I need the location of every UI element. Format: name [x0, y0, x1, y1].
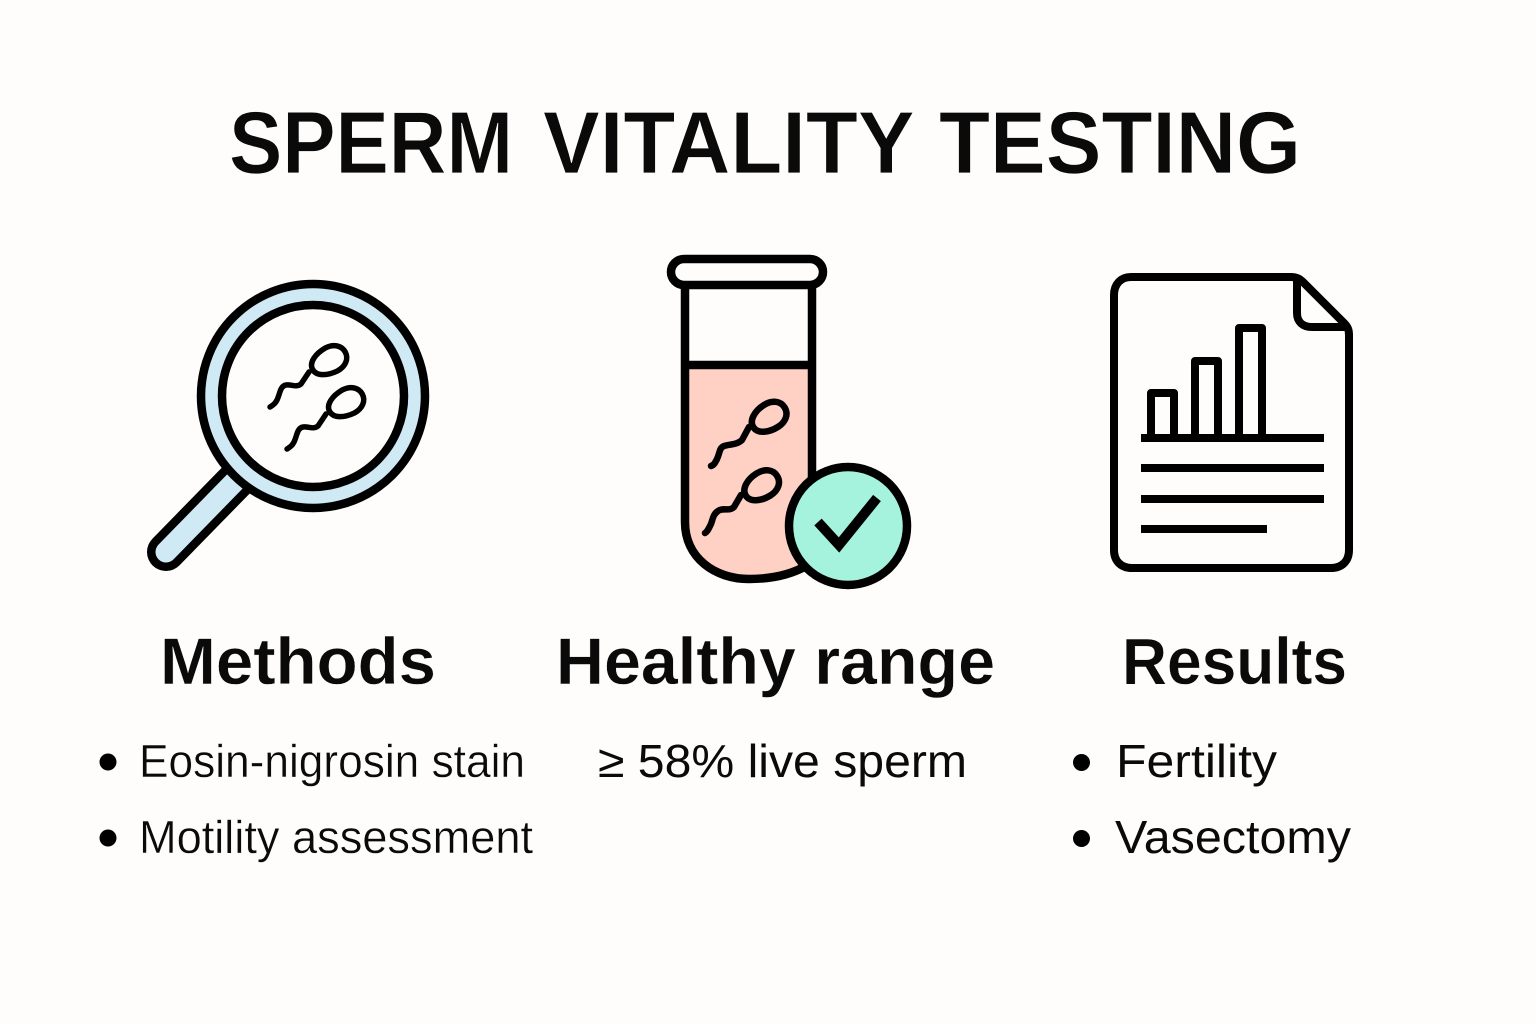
magnifier lens: [201, 284, 425, 508]
list: results: Fertility: [1116, 735, 1277, 787]
icon: report document: [1114, 277, 1349, 568]
title: SPERM: [229, 93, 513, 192]
list: results: [1073, 735, 1351, 863]
title: VITALITY: [543, 93, 914, 192]
document text lines: [1141, 468, 1324, 529]
tube walls: [685, 285, 812, 579]
list: results: Vasectomy: [1115, 811, 1351, 863]
list: methods: Eosin-nigrosin stain: [139, 735, 525, 787]
list: methods: Motility assessment: [139, 811, 533, 863]
bar chart: [1141, 328, 1324, 438]
liquid level line: [685, 361, 812, 369]
icon: test tube with check badge: [671, 259, 907, 585]
list: methods: [100, 735, 533, 863]
folded corner: [1297, 279, 1347, 327]
heading: Healthy range: Healthy range: [556, 624, 995, 698]
sperm cells in tube: [705, 396, 792, 533]
text: healthy range value: ≥ 58% live sperm: [598, 735, 967, 787]
icon: magnifying glass: [166, 284, 425, 552]
magnifier handle: [166, 466, 250, 552]
tube liquid: [689, 369, 808, 577]
check badge: [789, 467, 907, 585]
heading: Methods: Methods: [160, 624, 436, 698]
tube rim: [671, 259, 823, 285]
sperm cells in lens: [270, 341, 368, 449]
document outline: [1114, 277, 1349, 568]
title: TESTING: [939, 93, 1301, 192]
heading: Results: Results: [1122, 624, 1347, 698]
